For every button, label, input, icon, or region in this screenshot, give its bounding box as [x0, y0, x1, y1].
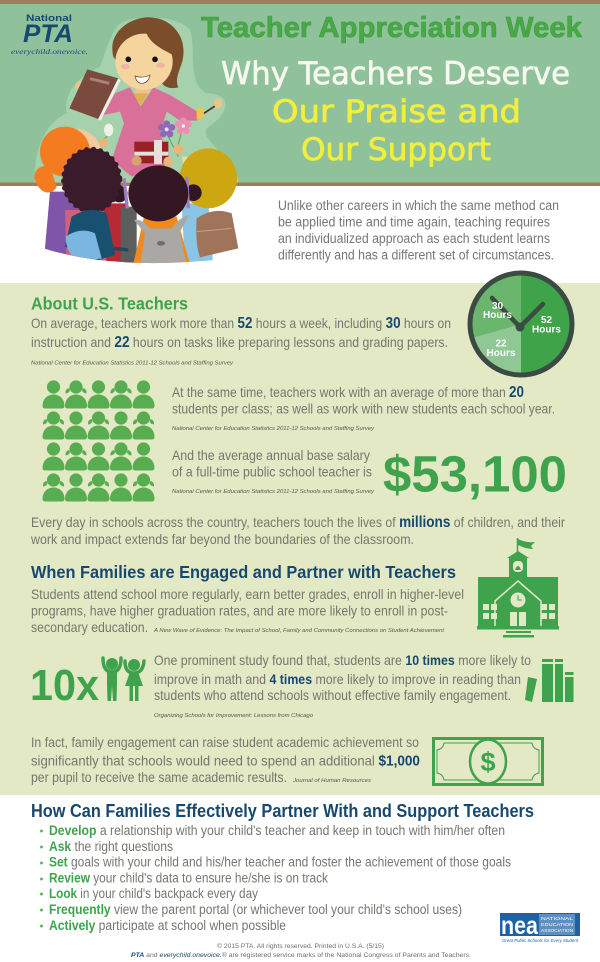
footer: [131, 942, 471, 959]
text: salary: And the average annual base salary: [172, 447, 370, 463]
text: student outcomes: [31, 586, 464, 635]
text: millions of children: Every day in schools across the country, teachers touch the lives of millions of children, and their: [31, 514, 565, 531]
icon: books: [525, 659, 574, 702]
list: ways to partner: Look in your child's backpack every day: [49, 886, 258, 901]
text: 10 times study: Organizing Schools for Improvement: Lessons from Chicago: [154, 713, 313, 719]
logo: NEA: EDUCATION: [541, 922, 573, 927]
clock chart: weekly hours: Hours: [483, 310, 512, 321]
pictogram: twenty students: [42, 380, 154, 502]
text: salary: National Center for Education Statistics 2011-12 Schools and Staffing Survey: [172, 489, 375, 495]
chalk headline: Why Teachers Deserve: [221, 56, 570, 92]
list: ways to partner: Develop a relationship with your child's teacher and keep in touch with him/her often: [49, 823, 505, 838]
text: salary: [172, 447, 375, 495]
text: student outcomes: programs, have higher graduation rates, and are more likely to enroll in post-: [31, 602, 448, 618]
icon: dollar bill: [434, 738, 542, 784]
text: $1,000 per pupil: Journal of Human Resources: [292, 778, 371, 784]
list: ways to partner: [40, 823, 511, 933]
icon: two children with raised arms: [103, 658, 144, 701]
text: hours worked: instruction and 22 hours on tasks like preparing lessons and grading papers.: [31, 334, 448, 351]
intro text: an individualized approach as each student learns: [278, 231, 550, 246]
clock chart: weekly hours: Hours: [532, 324, 561, 336]
text: $1,000 per pupil: per pupil to receive the same academic results.: [31, 769, 287, 785]
text: millions of children: [30, 514, 565, 547]
flowers and gift: [99, 117, 192, 167]
logo: National PTA: PTA: [23, 20, 73, 48]
logo: NEA: nea: [501, 912, 539, 940]
text: 10 times study: [154, 652, 531, 719]
icon: dollar bill: $: [480, 747, 496, 777]
clock chart: weekly hours: 22: [495, 338, 507, 350]
intro text: be applied time and time again, teaching requires: [278, 214, 550, 230]
footer: PTA and everychild.onevoice. ® are registered service marks of the National Congress of Parents and Teachers.: [131, 951, 471, 959]
list: ways to partner: Set goals with your child and his/her teacher and foster the achievement of those goals: [49, 854, 511, 870]
clock chart: weekly hours: 30: [492, 301, 503, 312]
list: ways to partner: Frequently view the parent portal (or whichever tool your child's school uses): [49, 902, 462, 917]
text: salary: of a full-time public school teacher is: [172, 464, 372, 480]
list: ways to partner: Ask the right questions: [49, 839, 173, 854]
text: $1,000 per pupil: significantly that schools would need to spend an additional $1,000: [31, 752, 420, 770]
text: $1,000 per pupil: [31, 734, 420, 785]
halo around teacher: [35, 18, 238, 183]
clock chart: weekly hours: [470, 273, 572, 375]
clock chart: weekly hours: Hours: [487, 348, 516, 359]
logo: NEA: NATIONAL: [541, 916, 574, 921]
text: student outcomes: secondary education.: [31, 619, 148, 635]
logo: NEA: Great Public Schools for Every Student: [502, 938, 579, 944]
footer: © 2015 PTA. All rights reserved. Printed in U.S.A. (5/15): [217, 942, 384, 950]
text: 10 times study: students who attend schools without effective family engagement.: [154, 687, 511, 703]
title: Teacher Appreciation Week: Teacher Appreciation Week: [201, 12, 583, 44]
text: $1,000 per pupil: In fact, family engagement can raise student academic achievement so: [31, 734, 419, 750]
intro text: differently and has a different set of circumstances.: [278, 248, 554, 262]
heading: How Can Families: How Can Families Effectively Partner With and Support Teachers: [31, 801, 534, 821]
text: 10 times study: One prominent study found that, students are 10 times more likely to: [154, 652, 531, 668]
teacher: [69, 17, 222, 177]
text: hours worked: On average, teachers work more than 52 hours a week, including 30 hours on: [31, 315, 451, 332]
intro text: [278, 198, 559, 262]
chalkboard: [0, 0, 600, 186]
big number: 10x: 10x: [30, 661, 99, 710]
text: class size: [172, 384, 555, 432]
text: 10 times study: improve in math and 4 times more likely to improve in reading than: [154, 671, 521, 687]
heading: About U.S. Teachers: About U.S. Teachers: [31, 294, 188, 314]
big number: salary: $53,100: [383, 446, 567, 502]
logo: National PTA: National: [26, 13, 72, 24]
list: ways to partner: Actively participate at school when possible: [49, 918, 286, 933]
chalk headline: Our Support: [301, 132, 491, 168]
text: student outcomes: Students attend school more regularly, earn better grades, enroll in higher-level: [31, 586, 464, 602]
text: student outcomes: A New Wave of Evidence: The Impact of School, Family and Community Connections on Student Achievement: [153, 628, 444, 634]
heading: When Families are Engaged: When Families are Engaged and Partner with Teachers: [31, 562, 456, 582]
text: millions of children: work and impact extends far beyond the boundaries of the classroom.: [30, 531, 414, 547]
intro text: Unlike other careers in which the same method can: [278, 198, 559, 213]
chalk headline: [221, 56, 570, 168]
logo: National PTA: everychild.onevoice.: [11, 47, 88, 56]
logo: NEA: [500, 912, 580, 944]
students: [34, 127, 238, 267]
text: hours worked: National Center for Education Statistics 2011-12 Schools and Staffing Survey: [31, 360, 234, 366]
text: class size: National Center for Education Statistics 2011-12 Schools and Staffing Survey: [172, 426, 375, 432]
logo: National PTA: [11, 13, 88, 56]
illustration: teacher with students: [34, 17, 238, 267]
clock chart: weekly hours: 52: [541, 315, 552, 326]
logo: NEA: ASSOCIATION: [541, 928, 573, 933]
text: class size: At the same time, teachers work with an average of more than 20: [172, 384, 524, 401]
text: hours worked: [31, 315, 451, 366]
icon: school building: [477, 538, 559, 638]
list: ways to partner: Review your child's data to ensure he/she is on track: [49, 870, 328, 886]
chalk headline: Our Praise and: [272, 94, 521, 130]
pale green section background: [0, 283, 600, 795]
